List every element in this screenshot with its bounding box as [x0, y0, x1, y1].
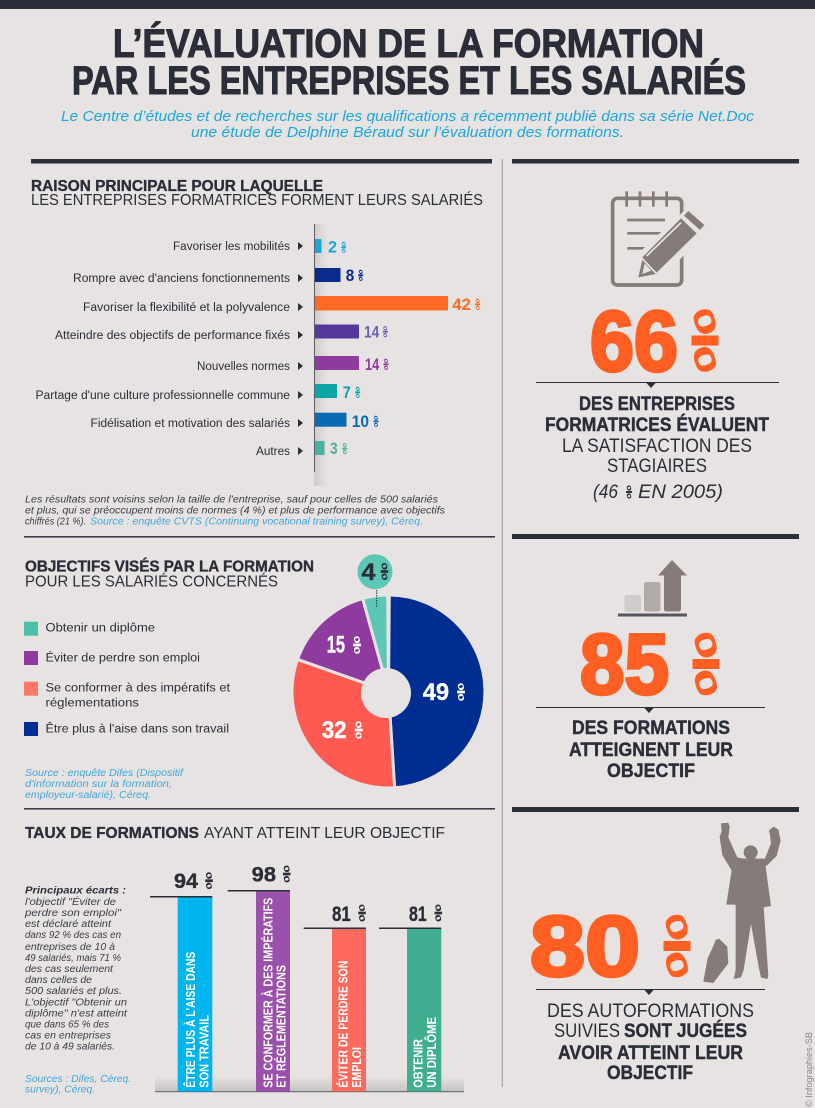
column: 94 %: ÊTRE PLUS À L'AISE DANS	[183, 951, 198, 1088]
row: autres	[256, 441, 348, 455]
text: 66 % description: FORMATRICES ÉVALUENT	[545, 414, 769, 436]
row: fonctionnements: 8	[346, 266, 354, 285]
figure: 85 %: %	[670, 624, 741, 704]
text block: principaux écarts: cas en entreprises	[25, 1031, 111, 1042]
text: 85 % description	[569, 718, 733, 782]
note and source: Source : enquête CVTS (Continuing vocational training survey), Céreq.	[90, 516, 423, 527]
text block: principaux écarts	[24, 884, 128, 1053]
text block: principaux écarts: diplôme" n'est atteint	[25, 1008, 128, 1020]
row: performance	[55, 324, 388, 342]
row: autres: 3	[330, 439, 338, 458]
heading: objectifs: POUR LES SALARIÉS CONCERNÉS	[25, 574, 278, 591]
row: normes: Nouvelles normes	[197, 361, 290, 373]
column: 94 %: %	[199, 870, 218, 892]
column: 81 % diplôme: 81	[409, 902, 427, 926]
source: taux	[25, 1074, 131, 1096]
legend: Être plus à l'aise dans son travail	[46, 723, 229, 736]
callout: 4 %: %	[375, 561, 394, 582]
source: taux: Sources : Difes, Céreq.	[25, 1074, 131, 1085]
column: 81 % diplôme	[379, 902, 448, 1092]
column: 81 % diplôme: UN DIPLÔME	[424, 1017, 439, 1088]
note and source: Les résultats sont voisins selon la taille de l'entreprise, sauf pour celles de 500 salariés	[25, 495, 438, 506]
column: 98 %	[228, 863, 296, 1092]
callout: 4 %: 4	[362, 559, 376, 586]
row: fidélisation	[92, 412, 379, 427]
text: 66 % description	[545, 394, 769, 503]
heading: raison principale: LES ENTREPRISES FORMATRICES FORMENT LEURS SALARIÉS	[31, 192, 483, 209]
row: fidélisation: %	[369, 414, 382, 429]
text: 85 % description: OBJECTIF	[607, 761, 695, 782]
row: normes: 14	[365, 355, 380, 374]
text block: principaux écarts: que dans 65 % des	[25, 1020, 109, 1031]
figure: 85 %: 85	[580, 618, 669, 712]
text: 85 % description: ATTEIGNENT LEUR	[569, 740, 733, 761]
row: culture: %	[351, 385, 363, 400]
figure: 85 %	[580, 632, 720, 696]
value: 32 %: %	[348, 719, 369, 742]
value: 32 %	[322, 721, 363, 739]
source: pie: Source : enquête Difes (Dispositif	[25, 768, 184, 779]
note and source: chiffrés (21 %).	[25, 516, 86, 527]
value: 49 %: 49	[423, 679, 449, 706]
row: mobilités: %	[337, 240, 349, 255]
column: 81 % diplôme: OBTENIR	[411, 1038, 426, 1088]
row: flexibilité: Favoriser la flexibilité et la polyvalence	[83, 302, 290, 314]
legend: Éviter de perdre son emploi	[46, 652, 200, 665]
bar chart rows	[36, 238, 483, 458]
icon: notepad and pencil	[613, 191, 708, 285]
text: 66 % description: %	[621, 484, 637, 501]
panel: raison principale bar chart	[25, 178, 483, 527]
column: 98 %: 98	[252, 863, 276, 887]
row: performance: 14	[364, 322, 380, 341]
row: culture	[36, 383, 363, 402]
text: 80 % description: DES AUTOFORMATIONS	[547, 1001, 754, 1022]
text block: principaux écarts: perdre son emploi"	[24, 908, 122, 919]
row: autres: %	[338, 442, 350, 456]
text block: principaux écarts: dans 92 % des cas en	[25, 930, 121, 941]
value: 49 %	[422, 683, 465, 701]
text block: principaux écarts: dans celles de	[25, 975, 93, 986]
legend: Obtenir un diplôme	[46, 623, 155, 635]
text block: principaux écarts: 49 salariés, mais 71 %	[25, 953, 121, 964]
figure: 66 %: %	[669, 301, 740, 381]
row: autres: Autres	[256, 446, 290, 458]
source: taux: survey), Céreq.	[25, 1085, 95, 1096]
heading: raison principale	[31, 178, 483, 209]
text block: principaux écarts: Principaux écarts :	[25, 884, 126, 896]
text: 80 % description: OBJECTIF	[607, 1063, 693, 1084]
row: flexibilité: 42	[452, 295, 471, 314]
text: 80 % description	[547, 1001, 754, 1084]
row: flexibilité	[83, 295, 483, 314]
text block: principaux écarts: est déclaré atteint	[25, 919, 112, 930]
text: 66 % description: LA SATISFACTION DES	[562, 436, 752, 457]
subtitle: Le Centre d’études et de recherches sur les qualifications a récemment publié dans sa série Net.Doc	[61, 109, 755, 125]
text: 80 % description: AVOIR ATTEINT LEUR	[558, 1043, 743, 1064]
column: 94 %: 94	[174, 869, 198, 893]
callout: 4 %	[358, 554, 394, 607]
row: fonctionnements: %	[354, 268, 366, 283]
figure: 80 %: 80	[530, 900, 640, 994]
row: fidélisation: 10	[352, 412, 369, 431]
row: normes	[198, 356, 388, 370]
value: 32 %: 32	[322, 717, 347, 744]
row: performance: %	[378, 325, 391, 339]
figure: 80 %	[531, 914, 690, 978]
text: 85 % description: DES FORMATIONS	[572, 718, 730, 739]
row: fidélisation: Fidélisation et motivation des salariés	[90, 418, 290, 430]
icon: rising bars	[618, 560, 687, 616]
row: performance: Atteindre des objectifs de performance fixés	[55, 330, 290, 342]
column: 98 %: SE CONFORMER À DES IMPÉRATIFS	[261, 897, 276, 1088]
value: 15 %: %	[347, 634, 367, 657]
column: 81 %	[304, 902, 371, 1092]
text: 80 % description: SUIVIES	[554, 1021, 620, 1042]
panel: stat 85 %	[536, 560, 765, 782]
panel: stat 80 %	[530, 823, 781, 1084]
column: 81 %: 81	[332, 902, 351, 926]
column: 81 %: EMPLOI	[349, 1047, 364, 1088]
subtitle	[61, 109, 755, 141]
column: 94 %	[150, 869, 218, 1092]
source: pie: d'information sur la formation,	[25, 779, 172, 790]
title	[72, 21, 746, 103]
figure: 66 %	[591, 309, 718, 374]
figure: 66 %: 66	[590, 294, 678, 390]
row: culture: 7	[343, 383, 351, 402]
column chart	[150, 863, 464, 1092]
column: 81 %: %	[352, 902, 371, 924]
heading: objectifs	[25, 559, 314, 591]
heading: taux: AYANT ATTEINT LEUR OBJECTIF	[204, 825, 445, 842]
text: 66 % description: DES ENTREPRISES	[579, 394, 735, 415]
row: mobilités: Favoriser les mobilités	[173, 241, 290, 253]
text: 66 % description: EN 2005)	[638, 482, 723, 503]
text: 80 % description: SONT JUGÉES	[624, 1020, 747, 1042]
legend: réglementations	[46, 698, 139, 710]
text block: principaux écarts: de 10 à 49 salariés.	[25, 1042, 115, 1053]
row: culture: Partage d'une culture professionnelle commune	[36, 390, 290, 402]
text block: principaux écarts: des cas seulement	[25, 964, 114, 975]
pie chart	[292, 595, 485, 788]
legend	[24, 622, 231, 736]
title: L’ÉVALUATION DE LA FORMATION	[113, 21, 704, 66]
row: normes: %	[379, 357, 392, 372]
figure: 80 %: %	[641, 906, 712, 986]
row: mobilités	[174, 239, 346, 253]
row: mobilités: 2	[328, 238, 337, 257]
column: 81 %: ÉVITER DE PERDRE SON	[336, 961, 351, 1088]
row: flexibilité: %	[471, 297, 483, 312]
column: 94 %: SON TRAVAIL	[196, 1015, 211, 1088]
text: 66 % description: (46	[593, 482, 618, 503]
text: 66 % description: STAGIAIRES	[607, 456, 707, 477]
legend: Se conformer à des impératifs et	[46, 683, 231, 695]
text block: principaux écarts: L'objectif "Obtenir un	[25, 998, 127, 1008]
credit: © Infographies-SB	[804, 1032, 815, 1107]
value: 15 %: 15	[327, 632, 345, 659]
source: pie: employeur-salarié), Céreq.	[25, 790, 151, 801]
panel: objectifs pie chart	[24, 554, 485, 801]
heading: taux: TAUX DE FORMATIONS	[25, 825, 199, 842]
note and source	[25, 495, 445, 527]
note and source: et plus, qui se préoccupent moins de normes (4 %) et plus de performance avec objectifs	[25, 506, 445, 516]
column: 98 %: %	[277, 863, 296, 885]
row: fonctionnements: Rompre avec d'anciens fonctionnements	[73, 273, 290, 285]
icon: man with raised arms and briefcase	[703, 823, 781, 983]
heading: raison principale: RAISON PRINCIPALE POUR LAQUELLE	[31, 178, 323, 195]
panel: stat 66 %	[536, 191, 779, 503]
subtitle: une étude de Delphine Béraud sur l’évaluation des formations.	[191, 125, 624, 141]
heading: taux	[25, 825, 445, 842]
column: 98 %: ET RÉGLEMENTATIONS	[274, 965, 289, 1088]
source: pie	[25, 768, 184, 801]
column: 81 % diplôme: %	[428, 902, 448, 924]
row: fonctionnements	[74, 268, 364, 284]
panel: taux de formations	[24, 825, 464, 1096]
text block: principaux écarts: entreprises de 10 à	[25, 942, 116, 953]
value: 15 %	[328, 636, 361, 654]
value: 49 %: %	[451, 681, 471, 704]
heading: objectifs: OBJECTIFS VISÉS PAR LA FORMATION	[25, 559, 314, 576]
text block: principaux écarts: l'objectif "Éviter de	[25, 897, 117, 908]
text block: principaux écarts: 500 salariés et plus.	[25, 986, 122, 997]
